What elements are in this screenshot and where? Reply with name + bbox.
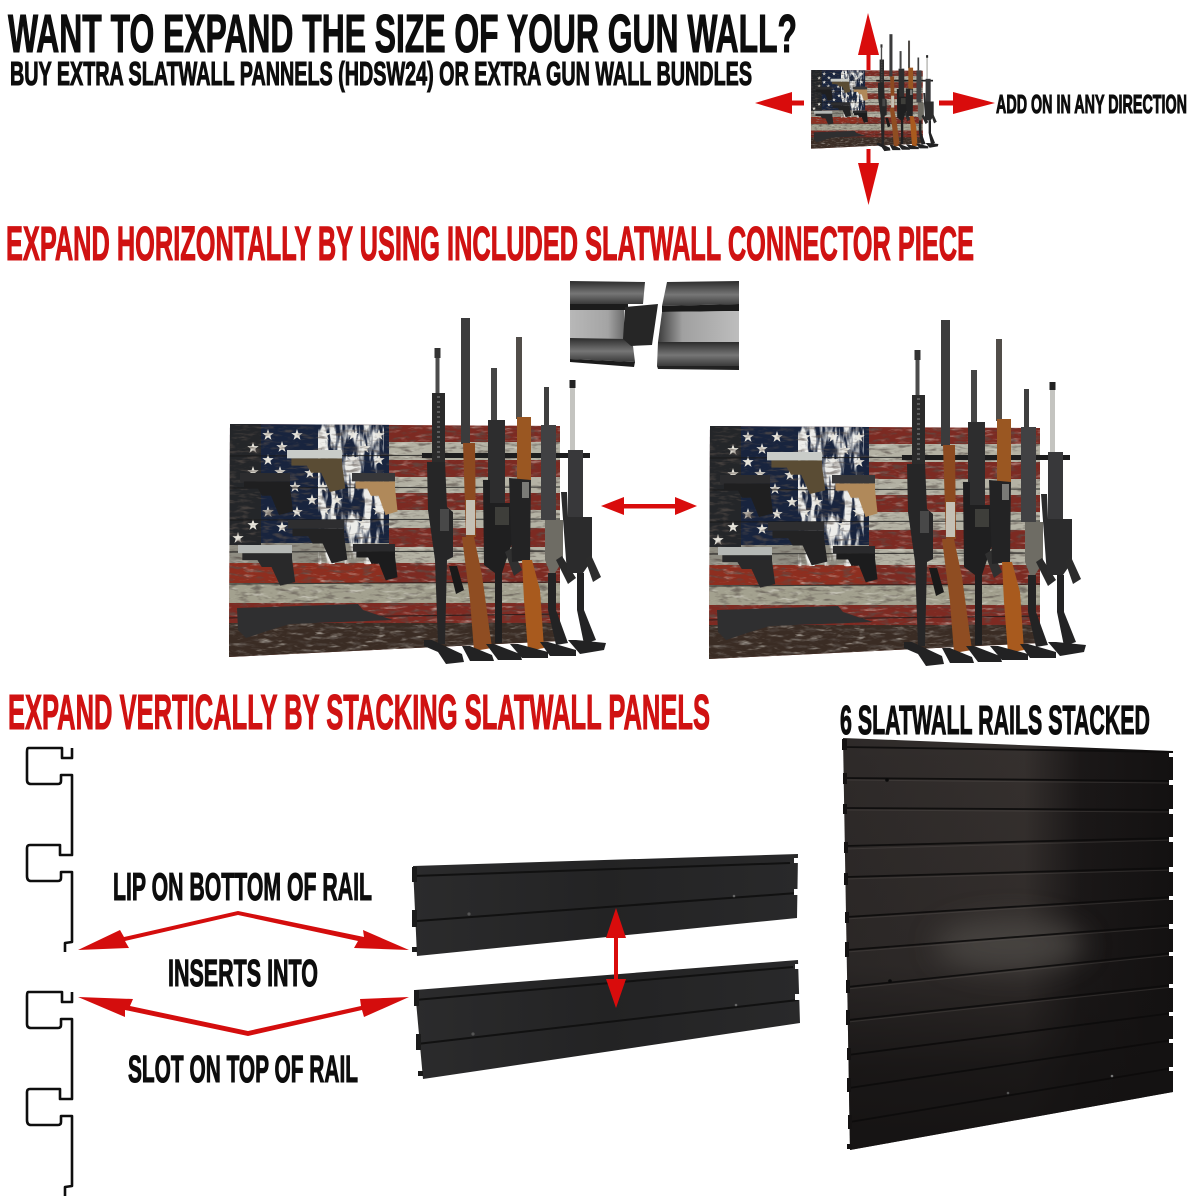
rail profile bottom [27,992,72,1196]
arrows: lip [78,911,409,950]
pistol 4 [288,520,347,563]
label: slot on top of rail: SLOT ON TOP OF RAIL [128,1049,358,1091]
double arrow between walls [601,497,697,515]
gun wall left [225,318,606,664]
stacked slatwall panel [842,738,1174,1150]
connector piece photo [570,281,739,370]
slatwall rail upper [412,854,799,956]
rifle 4 [509,337,544,651]
rifle rail [422,453,590,458]
label: inserts into: INSERTS INTO [168,953,318,995]
rifle 2 [461,318,492,651]
magazine shelf [237,604,393,638]
flag panel [225,420,565,660]
rifle 1 [427,348,464,644]
slatwall rail lower [414,960,801,1079]
rail profile top [27,748,72,952]
arrows: slot [78,997,409,1036]
pistol 5 [353,544,398,580]
gun wall right [705,320,1086,666]
rifle base rack [424,640,606,664]
pistol 3 [352,473,398,515]
pistol 2 [240,473,293,515]
thumbnail gun wall [810,34,938,151]
rifle 5 [541,387,576,645]
label: lip on bottom of rail: LIP ON BOTTOM OF RAIL [113,866,372,909]
rifle 3 [483,368,522,643]
rifle 6 [561,380,601,644]
pistol 6 [238,545,295,586]
vertical double arrow [606,908,626,1008]
pistol 1 [287,450,345,492]
arrows: add on in any direction [755,13,995,205]
